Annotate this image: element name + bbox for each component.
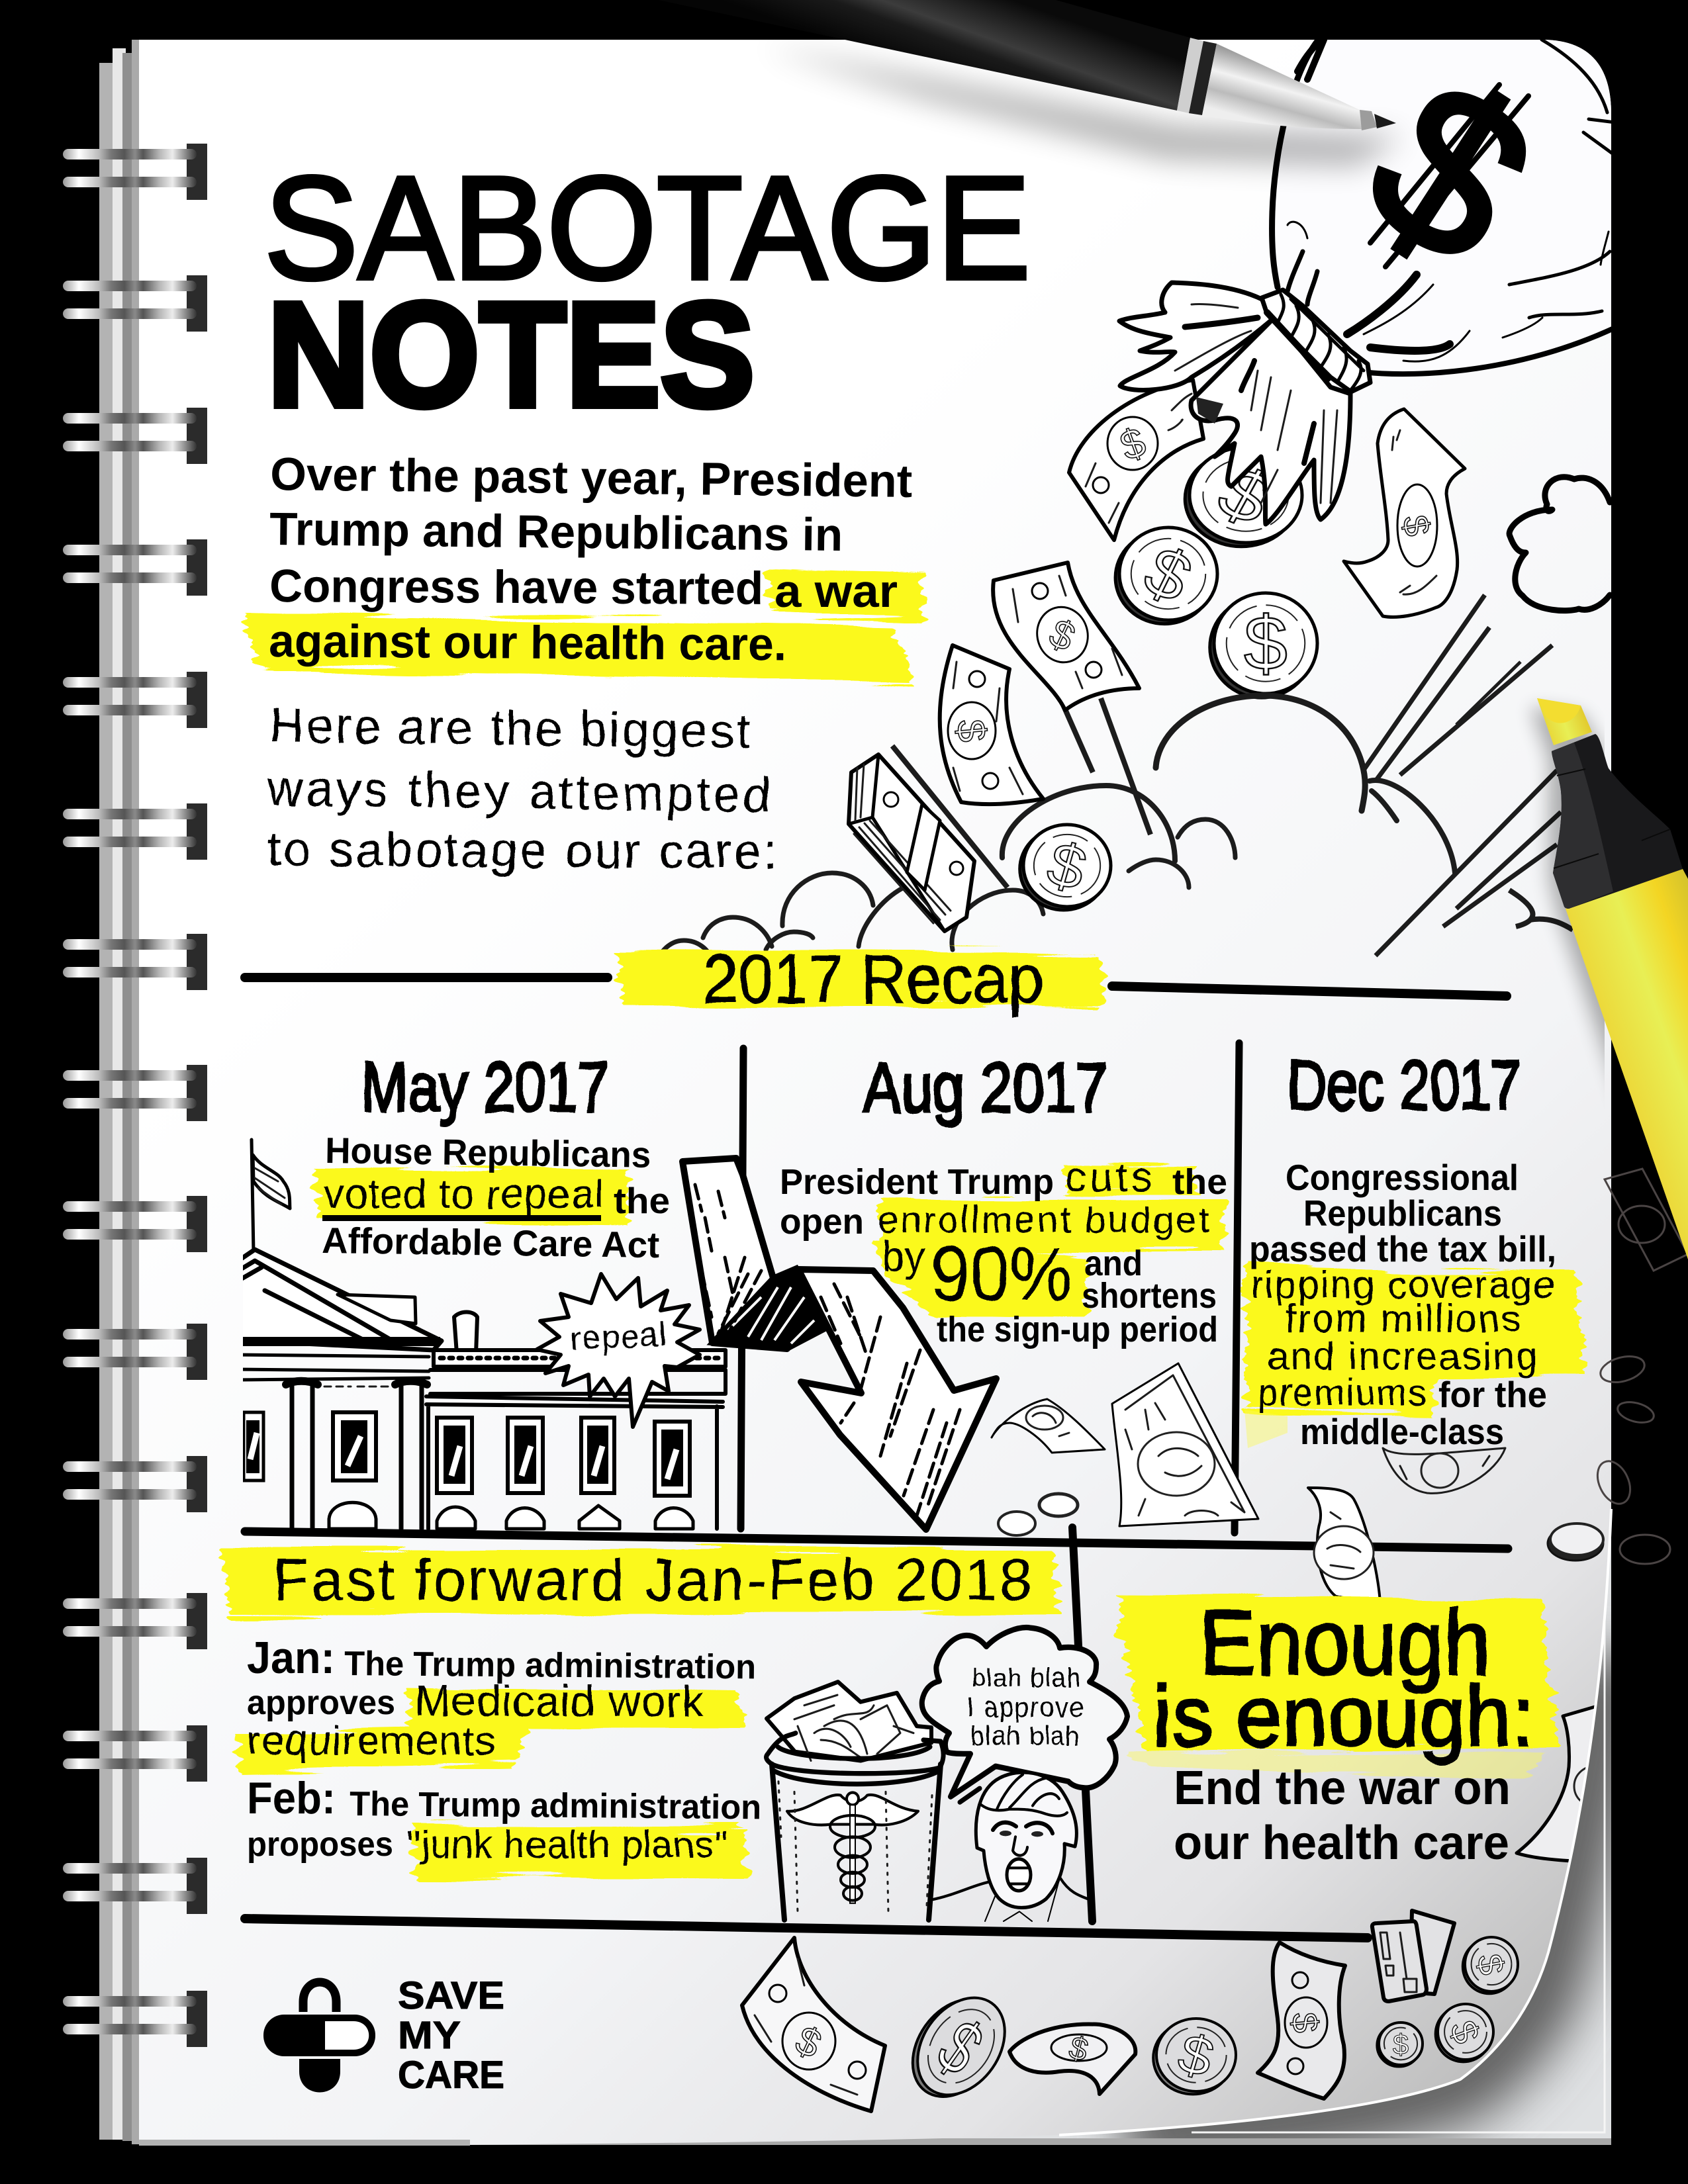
title: NOTES — [267, 272, 755, 437]
speech burst: repeal: repeal — [569, 1315, 667, 1357]
logo text: CARE — [398, 2054, 504, 2097]
date: aug: Aug 2017 — [863, 1049, 1107, 1127]
bill: $ — [1284, 2011, 1325, 2034]
text: president trump cuts: 90% — [931, 1231, 1072, 1317]
coin behind bag neck — [1185, 447, 1302, 547]
text: house republicans: voted to repeal — [324, 1171, 604, 1217]
logo icon — [263, 1982, 375, 2093]
call to action — [1174, 1762, 1511, 1870]
text: tax bill: passed the tax bill, — [1249, 1228, 1556, 1269]
text: tax bill: middle-class — [1300, 1411, 1504, 1452]
bill: $ — [949, 717, 994, 744]
logo: save my care — [263, 1974, 504, 2097]
pen — [659, 0, 1396, 130]
handwritten lead-in: to sabotage our care: — [267, 821, 777, 879]
title — [264, 146, 1031, 437]
callout: enough is enough: is enough: — [1153, 1668, 1534, 1764]
bottom money illustrations — [742, 1911, 1518, 2115]
vertical rule 3 — [1072, 1527, 1092, 1921]
logo text: SAVE — [398, 1974, 504, 2017]
text: jan and feb: proposes — [247, 1825, 393, 1864]
intro paragraph: a war — [774, 565, 898, 617]
text: jan and feb: "junk health plans" — [407, 1823, 728, 1866]
coin — [1210, 593, 1317, 698]
date: may: May 2017 — [361, 1048, 609, 1126]
coin — [895, 1979, 1023, 2115]
panel: aug 2017 — [682, 1049, 1258, 1535]
handwritten lead-in — [267, 698, 777, 879]
illustration: money bag and falling money — [656, 30, 1615, 968]
bill falling from bag — [1069, 380, 1203, 540]
bubble text — [966, 1664, 1084, 1751]
coin: $ — [1040, 829, 1094, 903]
can rim — [767, 1733, 943, 1784]
bubble text: blah blah — [972, 1664, 1080, 1693]
highlight: 2017 recap — [619, 951, 1103, 1007]
windows — [244, 1412, 690, 1496]
text: tax bill: Congressional — [1286, 1157, 1519, 1198]
highlight: enough — [1119, 1595, 1559, 1777]
speech bubble — [922, 1627, 1127, 1802]
text: tax bill: for the — [1438, 1374, 1547, 1415]
panel: dec 2017 — [1249, 1046, 1556, 1493]
sketch: coins — [998, 1494, 1078, 1535]
crumpled papers — [767, 1682, 931, 1760]
speed lines — [892, 595, 1573, 956]
text: president trump cuts: the — [1172, 1162, 1227, 1202]
text: tax bill — [1249, 1157, 1556, 1452]
bill: $ — [789, 2017, 828, 2067]
text: jan and feb: requirements — [247, 1718, 495, 1764]
text: president trump cuts: open — [780, 1202, 864, 1242]
bill right of bag — [1344, 409, 1465, 617]
coin: $ — [1133, 531, 1203, 617]
call to action: our health care — [1174, 1817, 1509, 1870]
callout: enough is enough: Enough — [1199, 1590, 1491, 1694]
margin sketches on black — [1591, 1169, 1688, 1564]
text: house republicans: the — [614, 1180, 670, 1221]
text: house republicans: House Republicans — [325, 1130, 651, 1175]
heading: 2017 recap: 2017 Recap — [703, 941, 1043, 1018]
coin — [1463, 1937, 1518, 1993]
highlights: fast forward section — [222, 1549, 1059, 1878]
stack of money — [849, 754, 974, 931]
callout: enough is enough — [1153, 1590, 1534, 1764]
bill behind curl — [1517, 1701, 1615, 1866]
text: tax bill: premiums — [1258, 1371, 1427, 1413]
bill — [742, 1938, 885, 2111]
divider: recap right — [1112, 986, 1507, 996]
coin: $ — [1442, 2015, 1487, 2048]
text: jan and feb: The Trump administration — [344, 1645, 756, 1686]
text: tax bill: ripping coverage — [1251, 1263, 1555, 1306]
highlights: timeline — [312, 1163, 1583, 1415]
divider: recap left — [245, 973, 608, 982]
bubble text: blah blah — [970, 1722, 1079, 1751]
bill falling from bag: $ — [1115, 419, 1152, 470]
text: president trump cuts: shortens — [1082, 1276, 1217, 1316]
small coin on page — [1548, 1524, 1603, 1561]
coin — [1020, 825, 1111, 910]
coin: $ — [1244, 600, 1288, 686]
text: jan and feb — [247, 1633, 761, 1866]
coin — [1377, 2023, 1423, 2067]
handwritten lead-in: Here are the biggest — [269, 698, 750, 758]
bill — [1258, 1942, 1345, 2099]
small cloud — [1509, 477, 1610, 611]
icon: dollar sign on bag: $ — [1328, 30, 1573, 314]
text: jan and feb: approves — [247, 1684, 395, 1722]
bag neck cloth — [1119, 283, 1370, 524]
cloud arcs — [656, 696, 1455, 968]
intro paragraph — [269, 448, 913, 670]
sketch: falling bill on divider — [1308, 1488, 1380, 1607]
illustration: trash can — [767, 1682, 943, 1920]
text: jan and feb: The Trump administration — [350, 1785, 761, 1827]
title: SABOTAGE — [264, 146, 1031, 310]
divider: bottom — [245, 1919, 1368, 1938]
icon: dollar sign on bag — [1368, 82, 1531, 269]
icon: downward arrow — [682, 1158, 996, 1529]
rope — [1262, 290, 1370, 392]
page curl — [463, 1509, 1615, 2146]
vertical rule 2 — [1235, 1043, 1239, 1533]
illustration: trump — [931, 1772, 1088, 1921]
logo text: MY — [398, 2014, 461, 2057]
intro paragraph: Over the past year, President — [270, 448, 913, 507]
sketch: tall bill — [1112, 1363, 1258, 1526]
text: president trump cuts: President Trump — [780, 1162, 1054, 1202]
bill — [940, 645, 1043, 804]
divider: middle — [245, 1531, 1508, 1549]
text: president trump cuts: cuts — [1066, 1155, 1152, 1201]
can hatching — [778, 1782, 932, 1913]
bill: $ — [1066, 2030, 1092, 2068]
page bottom edge — [139, 2140, 470, 2146]
coin: $ — [923, 2004, 997, 2091]
coin: $ — [1393, 2029, 1409, 2060]
call to action: End the war on — [1174, 1762, 1511, 1815]
sketch: curved bill — [1383, 1448, 1505, 1493]
bill: $ — [1043, 610, 1082, 660]
caduceus — [787, 1793, 918, 1903]
intro paragraph: Congress have started — [269, 560, 763, 614]
highlighter — [1537, 698, 1688, 1259]
spiral binding — [63, 144, 207, 2047]
arched doors — [329, 1502, 693, 1529]
panel: may 2017 — [238, 1048, 726, 1529]
coin — [1115, 527, 1217, 624]
bill right of bag: $ — [1395, 512, 1437, 539]
pen shadow — [761, 46, 1403, 165]
text: house republicans — [322, 1130, 670, 1265]
logo text — [398, 1974, 504, 2097]
text: president trump cuts: by — [882, 1232, 924, 1280]
coin: $ — [1172, 2023, 1220, 2089]
handwritten lead-in: ways they attempted — [267, 760, 771, 823]
intro paragraph: Trump and Republicans in — [269, 503, 843, 561]
text: tax bill: and increasing — [1268, 1335, 1537, 1378]
text: jan and feb: Jan: — [247, 1633, 335, 1683]
text: jan and feb: Feb: — [247, 1773, 336, 1823]
text: house republicans: Affordable Care Act — [322, 1220, 660, 1265]
highlighter shadow — [1530, 707, 1681, 1276]
bubble text: I approve — [966, 1692, 1084, 1723]
coin: $ — [1470, 1951, 1511, 1978]
heading: fast forward: Fast forward Jan-Feb 2018 — [273, 1547, 1033, 1614]
text: president trump cuts: enrollment budget — [878, 1199, 1209, 1240]
speech burst: repeal — [537, 1274, 700, 1427]
highlights: intro — [244, 568, 925, 682]
coin behind bag neck: $ — [1205, 451, 1286, 539]
text: tax bill: from millions — [1286, 1297, 1521, 1340]
sketch: curved bill — [992, 1399, 1105, 1453]
text: jan and feb: Medicaid work — [414, 1676, 704, 1725]
text: president trump cuts: and — [1084, 1244, 1143, 1283]
notebook back pages — [99, 40, 140, 2144]
bill — [1009, 2024, 1135, 2094]
bill — [993, 563, 1139, 710]
coin — [1153, 2019, 1236, 2094]
text: president trump cuts — [780, 1155, 1227, 1349]
text: tax bill: Republicans — [1303, 1193, 1502, 1234]
money bag — [1272, 38, 1615, 381]
can body — [772, 1764, 941, 1920]
date: dec: Dec 2017 — [1288, 1046, 1521, 1124]
intro paragraph: against our health care. — [269, 615, 786, 670]
highlight fade: dec — [1244, 1410, 1288, 1448]
vertical rule 1 — [741, 1048, 743, 1529]
coin — [1436, 2004, 1493, 2062]
white house illustration — [238, 1140, 726, 1529]
icon: credit cards — [1372, 1911, 1454, 2001]
text: president trump cuts: the sign-up period — [937, 1310, 1218, 1349]
